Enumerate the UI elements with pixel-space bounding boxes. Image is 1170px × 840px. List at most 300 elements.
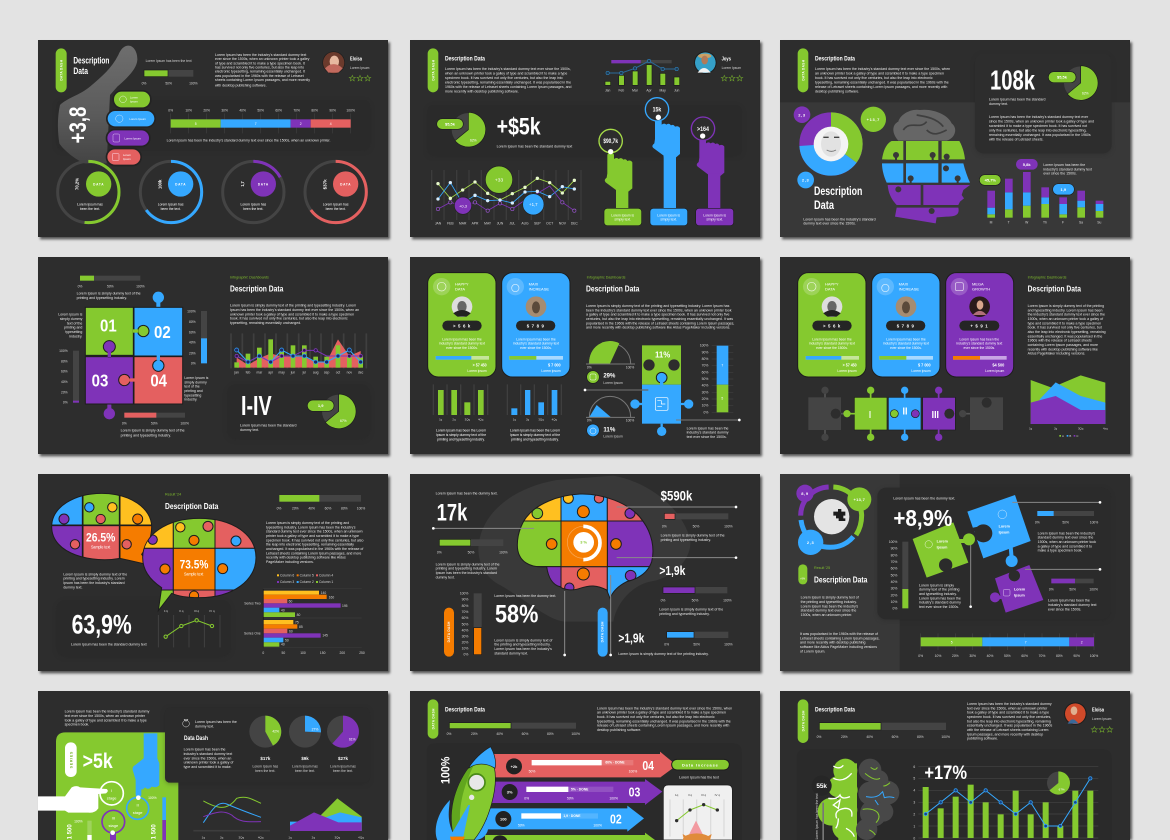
ring: blue: been the text. (161, 207, 181, 211)
gauge: 0% (277, 506, 281, 510)
stacked bar: Lorem Ipsum has been the industry's standard dummy text ever since the 1500s, when an unknown printer. (167, 139, 331, 143)
vertical gauge: orange: 30% (462, 634, 468, 638)
paragraph: and more recently with desktop publishing software like Aldus PageMaker including versions. (586, 326, 730, 330)
pie chart: 62% (1082, 92, 1089, 96)
paragraph: book. It has survived not only five centuries, but also the leap into electronic (230, 317, 348, 321)
gauge: top: Lorem Ipsum is simply dummy text of the (77, 291, 141, 295)
pie chart (307, 394, 356, 429)
ring: red (305, 161, 366, 223)
card: maxi increase: INCREASE (529, 287, 549, 292)
card: mega growth: ever since the 1500s. (964, 346, 995, 350)
stacked bar chart: Th (1043, 220, 1047, 224)
gauge: 60% (325, 506, 331, 510)
gauge: semi blue: Lorem Ipsum (603, 435, 623, 439)
gauge: 0% (447, 732, 451, 736)
small gauge: 0% (142, 81, 146, 85)
line chart: FEB (447, 222, 454, 226)
hand: green (599, 129, 642, 226)
bar chart: green: Lorem Ipsum has been the Lorem (436, 429, 486, 433)
gauge: blue: make a type specimen book. (1038, 549, 1082, 553)
block: 17k: dummy text. (436, 576, 455, 580)
vertical gauge: orange: 80% (462, 604, 468, 608)
pointer lines (432, 506, 737, 656)
gauge: red: 50% (151, 422, 158, 426)
arrow 02 blue: 100 (500, 817, 507, 822)
pill: data dash: DATA DASH (801, 710, 805, 731)
card: mega growth: + $ 9 1 (970, 323, 988, 328)
paragraph: specimen book. It has survived not only five centuries, but also the leap into (445, 76, 563, 80)
pie: green: Lorem Ipsum has (252, 765, 279, 769)
pills with icons: Lorem Ipsum (124, 136, 141, 140)
caption and paragraph: Lorem Ipsum has been the industry's standard dummy text ever (989, 115, 1089, 119)
stacked bar: 50% (1004, 654, 1011, 658)
pill: blue data dash: DATA DASH (601, 621, 605, 642)
mini line chart: 1'q (164, 609, 168, 613)
white card with chart: IV q (715, 793, 720, 797)
gauge: blue: 100% (1090, 521, 1098, 525)
paragraph: and more recently with desktop publishing (800, 641, 866, 645)
vertical gauge: purple: 40% (61, 380, 68, 384)
slide 3: head puzzle (780, 40, 1132, 239)
gauge: 80% (917, 735, 924, 739)
legend: Column 4 (319, 573, 333, 577)
paragraph: text ever since the 1500s. (919, 605, 959, 609)
vertical gauge: green: 10% (891, 600, 897, 604)
vertical gauge: purple (59, 349, 79, 405)
vertical bar (700, 344, 733, 414)
horizontal bar chart: 160 (329, 595, 334, 599)
caption: dummy text. (240, 428, 259, 432)
vertical bar: 20% (702, 397, 708, 401)
arrow 02 blue: 1,9 · DONE (563, 814, 581, 818)
puzzle: blue (967, 495, 1031, 567)
paragraph: Lorem Ipsum has been the industry's standard dummy (967, 702, 1052, 706)
paragraph: standard dummy text ever since the (801, 609, 856, 613)
circular ring diagram: +13,7 (853, 497, 866, 502)
vertical gauges (67, 796, 166, 840)
bar chart: green (433, 384, 488, 441)
block: 17k (436, 492, 508, 580)
pie: purple (327, 716, 359, 773)
card: maxi increase: MAXI (899, 282, 908, 287)
card: happy data: industry's standard dummy text (439, 342, 485, 346)
block: 17k: Lorem Ipsum is simply dummy text of the (436, 562, 500, 566)
card: maxi increase: industry's standard dummy text (513, 342, 559, 346)
block: >1,9k lower (618, 631, 733, 656)
stage III: III (112, 815, 115, 820)
puzzle: blue: Lorem (999, 524, 1011, 528)
stacked bar chart: 1,9 (1061, 187, 1067, 192)
paragraph: Letraset sheets containing Lorem Ipsum passages, and more (266, 551, 361, 555)
pill: data dash (798, 48, 808, 92)
paragraph: Lorem Ipsum has been the industry's standard dummy text ever since the 1500s, when (815, 67, 950, 71)
combo chart: jun (290, 371, 295, 375)
horizontal bar chart: 195 (342, 604, 348, 608)
mini combo chart (605, 59, 680, 92)
stage II: II (137, 802, 139, 807)
brain left lines (828, 765, 854, 837)
vertical gauge: purple: 100% (59, 349, 68, 353)
vertical gauge: orange: 60% (462, 616, 468, 620)
icon: money bag (183, 719, 189, 727)
small green pill (798, 564, 807, 584)
card: maxi increase: $ 7 8 9 (897, 323, 915, 328)
gauge: 100% (571, 732, 580, 736)
card: maxi increase: ever since the 1500s. (520, 346, 552, 350)
gauge: 100% (941, 735, 950, 739)
hand: purple (691, 117, 734, 226)
stacked bar: 10% (185, 108, 192, 112)
circular ring diagram: 2,3 (807, 540, 815, 545)
card: happy data (428, 273, 496, 377)
white card with chart: II q (688, 793, 692, 797)
horizontal bar chart: 100 (300, 651, 306, 655)
stacked bar: 20% (952, 654, 959, 658)
rocket (436, 747, 496, 840)
arrow 03 purple: 100% (609, 796, 618, 800)
bar line chart: 3 (913, 801, 915, 805)
mini line chart: III q (194, 609, 199, 613)
puzzle: green (913, 522, 975, 578)
gauge: top (77, 276, 145, 300)
vertical gauge: green: 40% (891, 580, 897, 584)
panel: 108k (975, 53, 1112, 153)
paragraph: text ever since the 1500s, when an unknown printer (65, 714, 146, 718)
arrow 04 red (493, 752, 677, 778)
block: $590k: 50% (693, 524, 699, 528)
pointer line (584, 389, 648, 391)
line chart: +33 (495, 178, 503, 184)
heading: Description Data (586, 284, 639, 294)
gauge: semi green: 100% (626, 365, 634, 369)
paragraph: type and scrambled it to make a type specimen (1028, 321, 1101, 325)
paragraph: electronic typesetting, remaining essentially unchanged. It (215, 70, 305, 74)
mini combo chart: May (660, 88, 666, 92)
heading: description data: Data (814, 198, 834, 212)
caption: Lorem Ipsum has been the industry's standard (803, 217, 876, 221)
horizontal bar chart: 140 (321, 591, 326, 595)
arrow 04 red: 04 (642, 759, 654, 773)
gauge: top: 50% (107, 285, 114, 289)
pill: series: SERIES (69, 751, 73, 768)
area chart: 1q (288, 835, 292, 839)
paragraph: also the leap into electronic typesetting, remaining (1028, 330, 1106, 334)
paragraph: printer took a galley of type and scrambled it to make a type (266, 534, 359, 538)
block: >1,9k lower: Lorem Ipsum is simply dummy text of the printing industry. (618, 652, 709, 656)
bar chart: green: 3Qq (465, 417, 470, 421)
block: >1,9k lower: >1,9k (618, 631, 645, 646)
bubble left: 26.5% (86, 531, 116, 545)
block: >1,9k lower: 50% (693, 643, 700, 647)
card: happy data: Lorem ipsum (837, 369, 857, 373)
ring: green: 70,2% (75, 177, 80, 190)
stage I (100, 782, 123, 805)
stage I: I (111, 788, 112, 793)
pill: orange data dash: DATA DASH (447, 621, 451, 642)
paragraph: ever since the 1500s, when an unknown printer took a galley (215, 57, 310, 61)
caption: Lorem Ipsum has been the standard dummy text (497, 145, 572, 149)
area chart: C (1076, 434, 1078, 438)
gauge: red: 0% (122, 422, 127, 426)
arrow 04 red: 50% (529, 770, 535, 774)
paragraph: typesetting, remaining essentially unchanged. It was popularised in the 1960s with the (597, 719, 731, 723)
top dark band (780, 40, 1130, 102)
bar chart: green: Ipsum is simply dummy text of the (436, 433, 486, 437)
stacked bar: 40% (239, 108, 246, 112)
block: 58%: standard dummy text. (494, 652, 528, 656)
block: 58%: Lorem Ipsum is simply dummy text of (494, 638, 552, 642)
area chart: 4xq (1103, 426, 1108, 430)
hand: green: Lorem Ipsum is (611, 213, 634, 217)
paragraph: containing Lorem Ipsum passages, and more (1028, 343, 1098, 347)
pie: green: been the text. (255, 769, 275, 773)
stacked bar chart: W (1025, 220, 1029, 224)
bar chart: blue: 2q (526, 417, 530, 421)
stage III (102, 810, 125, 840)
profile text (349, 57, 371, 81)
stacked bar: 90% (1073, 654, 1080, 658)
gauge: 20% (841, 735, 848, 739)
hand: blue: Lorem Ipsum is (657, 213, 680, 217)
block: 58%: the printing and typesetting industry. (494, 643, 551, 647)
heading: description data: Description (814, 184, 862, 198)
arrow 03 purple: 5% · DONE (571, 787, 589, 791)
arrow 02 blue: 50% (518, 823, 525, 827)
ring: red: been the text. (326, 207, 346, 211)
profile text: Lorem Ipsum (1092, 717, 1112, 721)
vertical gauge: green: 30% (891, 587, 897, 591)
gauge: 40% (308, 506, 315, 510)
horizontal bar chart: 145 (322, 634, 328, 638)
circular ring diagram: 8,9 (801, 491, 809, 496)
horizontal bar chart: 250 (359, 651, 365, 655)
value +17%: +17% (924, 763, 967, 784)
gauge: semi blue: 100% (626, 419, 634, 423)
panel (427, 743, 742, 840)
kicker: Infographic Dashboards (230, 275, 269, 279)
block: $590k (661, 488, 733, 542)
slide 4: four-piece puzzle (38, 257, 390, 456)
paragraph: centuries, but also the leap into electronic typesetting, remaining essentially unchanged. It was (586, 317, 733, 321)
line chart: APR (472, 222, 479, 226)
paragraph: Lorem Ipsum is simply (919, 583, 954, 587)
arrow 03 purple: 3% (507, 790, 513, 795)
pills with icons: Lorem (123, 153, 132, 157)
pie: purple: 61% (349, 737, 356, 741)
paragraph: typesetting, remaining essentially unchanged. (230, 321, 301, 325)
gauge: purple (1048, 579, 1098, 611)
puzzle numbers: 02 (154, 322, 171, 342)
bubble right: 73.5% (180, 557, 209, 571)
heading: Description Data (230, 284, 283, 294)
stacked bar chart: Su (1097, 220, 1102, 224)
paragraph: book. It has survived not only five centuries, but (1028, 326, 1102, 330)
pill: data dash (56, 48, 67, 92)
stacked bar: 100% (346, 108, 355, 112)
hand: purple: >164 (697, 127, 710, 133)
block: >1,9k upper: printing and typesetting industry. (659, 612, 710, 616)
note: text ever since the 1500s. (687, 435, 727, 439)
horizontal bar chart: Series Two (244, 601, 261, 605)
block: 17k: Ipsum has been the industry's standard (436, 571, 497, 575)
stacked bar chart: Sa (1079, 220, 1083, 224)
note: Lorem Ipsum has been the (687, 426, 729, 430)
puzzle row (808, 387, 1003, 441)
puzzle row: II (902, 406, 908, 417)
paragraph: text ever since the 1500s, when an unknown printer (967, 706, 1048, 710)
side gauge: Lorem Ipsum has been the text (815, 793, 819, 839)
block: $590k: Lorem Ipsum is simply dummy text of the (661, 534, 725, 538)
paragraph: It was popularised in the 1960s with the release of (800, 632, 878, 636)
caption and paragraph: Lorem Ipsum has been the standard (989, 98, 1046, 102)
combo chart: nov (347, 371, 352, 375)
pill: data dash: DATA DASH (431, 59, 435, 81)
mini combo chart: Mar (632, 88, 639, 92)
puzzle: purple: Ipsum (1014, 594, 1026, 598)
bar chart: blue: printing and typesetting industry. (511, 437, 559, 441)
card: maxi increase: MAXI (529, 282, 538, 287)
vertical gauge: green: 0% (893, 607, 897, 611)
paragraph: publishing software. (967, 737, 998, 741)
horizontal bar chart: 80 (297, 613, 301, 617)
area chart: 2q (1054, 426, 1058, 430)
panel paragraph: Lorem Ipsum has been the (184, 748, 226, 752)
arrow 03 purple: 50% (567, 796, 574, 800)
paragraph: 1960s with the release of Letraset sheets containing Lorem Ipsum passages, and (445, 85, 571, 89)
line chart: MAR (459, 222, 467, 226)
vertical gauge: green: 50% (891, 573, 897, 577)
caption: Lorem Ipsum has the text (679, 775, 719, 779)
stacked bar chart: T (1008, 220, 1010, 224)
line chart: +1,7 (529, 202, 538, 207)
profile text: Lorem Ipsum (350, 66, 370, 70)
puzzle numbers (92, 316, 171, 391)
pie: blue: been the text. (295, 769, 315, 773)
circular ring diagram (796, 485, 871, 555)
bar chart: blue (507, 384, 561, 441)
profile text (721, 57, 743, 81)
brain left: green (818, 759, 858, 840)
line chart: DEC (571, 222, 578, 226)
note: printing and typesetting industry. Lorem (63, 577, 125, 581)
avatar (322, 51, 345, 74)
vertical gauge: green: 20% (891, 593, 897, 597)
gauge: 60% (892, 735, 898, 739)
line chart: SEP (534, 222, 541, 226)
card: maxi increase: Lorem Ipsum has been the (886, 338, 926, 342)
ring: red: DATA (340, 182, 351, 186)
pills with icons: Lorem Ipsum (129, 117, 146, 121)
area chart: 3Qq (335, 835, 340, 839)
card: happy data: ever since the 1500s. (816, 346, 848, 350)
pie chart: $5,5k (445, 121, 456, 126)
gauge (817, 723, 950, 739)
pill: data dash (428, 699, 438, 739)
profile text: Eloisa (350, 57, 362, 63)
gauge: red: Lorem Ipsum is simply dummy text of the (121, 429, 185, 433)
pie chart (1048, 66, 1098, 100)
card: maxi increase: $ 7 000 (918, 363, 931, 368)
brain and head puzzle (882, 110, 970, 223)
brain silhouette backdrop (478, 476, 690, 622)
chart note: Lorem Ipsum has been the (1043, 163, 1085, 167)
block: 17k: 17k (437, 499, 468, 526)
paragraph: Lorem Ipsum has been the industry's standard dummy text (215, 53, 306, 57)
hand: purple: simply text. (706, 218, 723, 222)
paragraph: software like Aldus PageMaker including versions (800, 645, 877, 649)
horizontal bar chart: 200 (340, 651, 345, 655)
gauge: semi green: Lorem Ipsum (603, 381, 623, 385)
chart note: ever since the 1500s. (1043, 172, 1077, 176)
bar line chart (913, 765, 1098, 840)
area chart (1029, 375, 1108, 438)
bar chart: blue: Ipsum is simply dummy text of the (510, 433, 560, 437)
vertical bar: 7 (721, 363, 723, 367)
gauge (447, 723, 580, 736)
paragraph: has survived not only five centuries, but also the leap into (215, 65, 304, 69)
bar chart: green: printing and typesetting industry. (437, 437, 485, 441)
block: 17k: Lorem Ipsum has been the dummy text. (436, 492, 498, 496)
stacked bar: 4 (330, 122, 332, 126)
stacked bar: 30% (221, 108, 228, 112)
paragraph: book. It has survived not only five centuries, but also the leap into electronic (597, 715, 715, 719)
horizontal bar chart: 75 (295, 621, 299, 625)
card: mega growth: GROWTH (972, 287, 990, 292)
paragraph: took a galley of type and scrambled it to make a type (967, 711, 1049, 715)
profile text (1091, 708, 1113, 732)
pie: green (249, 716, 281, 773)
left note: Lorem Ipsum is (58, 313, 83, 317)
caption and paragraph: scrambled it to make a type specimen book. It has survived not (989, 124, 1087, 128)
vertical gauge: purple: 80% (61, 359, 68, 363)
card: maxi increase (872, 273, 940, 377)
vertical bar: 0% (704, 410, 708, 414)
vertical gauge: blue (187, 309, 207, 366)
puzzle (85, 292, 183, 419)
mini combo chart: Feb (618, 88, 624, 92)
puzzle: purple (990, 565, 1043, 613)
card: mega growth: industry's standard dummy text (956, 342, 1002, 346)
puzzle: green: Ipsum (937, 545, 948, 549)
badge: blue (797, 172, 814, 188)
bubble right: Sample text (184, 571, 204, 576)
pie: purple: been the text. (333, 769, 353, 773)
pie: purple: $27k (338, 756, 348, 761)
value +$5k: +$5k (497, 114, 541, 141)
vertical gauges: 100% (148, 796, 157, 800)
gauge: blue: 0% (1035, 521, 1040, 525)
value 100%: 100% (438, 756, 452, 784)
pill: data dash (798, 699, 808, 743)
small gauge: Lorem Ipsum has been the text (146, 59, 192, 63)
paragraph: when an unknown printer took a galley of type and scrambled it to make a type (445, 71, 567, 75)
line chart: OCT (546, 222, 553, 226)
bubble left (50, 492, 153, 566)
vertical bar: 50% (702, 377, 708, 381)
line chart: AUG (521, 222, 529, 226)
right note: Lorem Ipsum is (184, 376, 209, 380)
badge: blue: 2,3 (802, 178, 810, 183)
vertical gauge: purple: 60% (61, 370, 68, 374)
stacked bar: 60% (1021, 654, 1028, 658)
vertical gauge: orange: 50% (462, 622, 468, 626)
arrow 04 red: 100% (629, 770, 637, 774)
gauge: purple: 100% (1089, 587, 1098, 591)
right note: typesetting (184, 393, 201, 397)
caption and paragraph: only five centuries, but also the leap into electronic typesetting, (989, 128, 1087, 132)
line chart: JUL (509, 222, 515, 226)
card: happy data: HAPPY (825, 282, 839, 287)
